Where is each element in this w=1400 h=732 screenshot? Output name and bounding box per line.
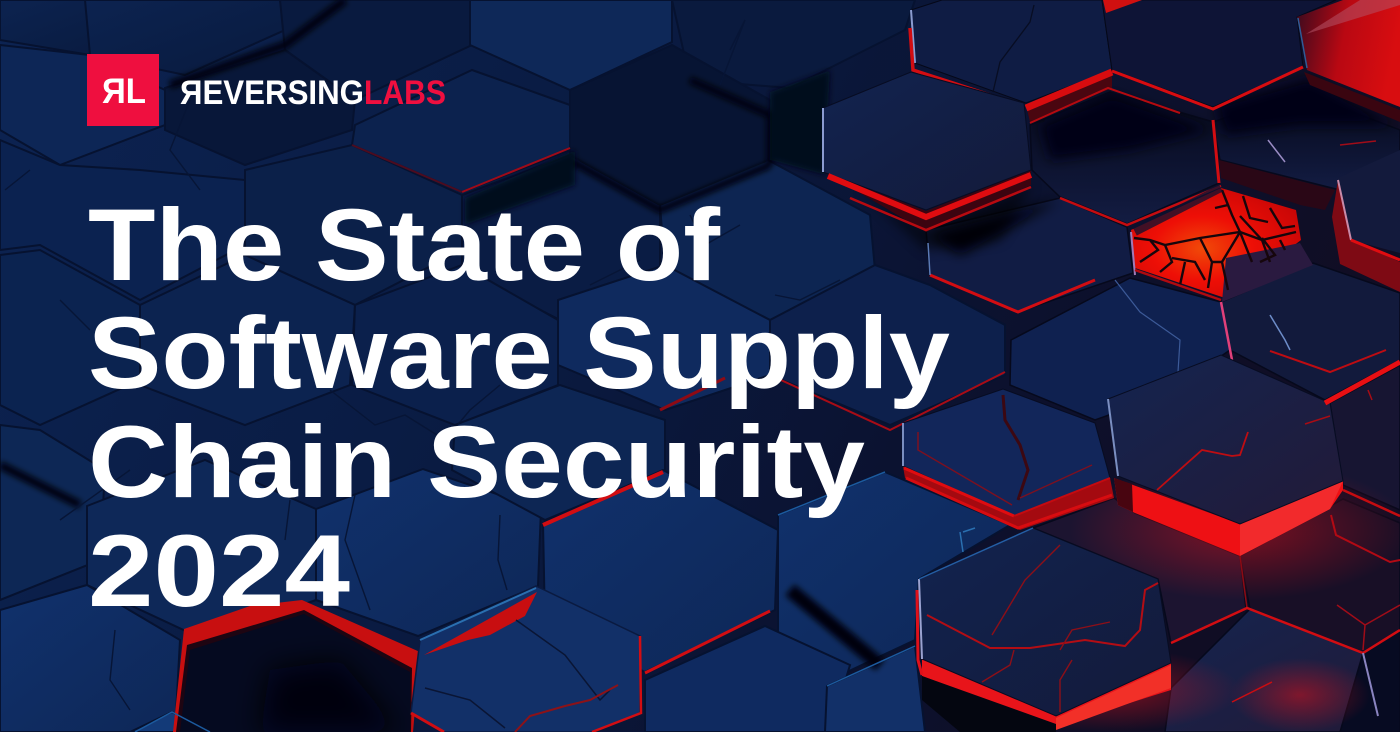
- title: [88, 188, 950, 628]
- hexagon: top centre: [910, 0, 1112, 103]
- hexagon: bright red rim: [1108, 355, 1400, 716]
- small blue crack: [960, 528, 975, 552]
- hexagon: red glowing corner: [1297, 0, 1400, 122]
- logo wordmark: ЯEVERSING: [180, 74, 364, 112]
- title: The State of: [88, 188, 721, 302]
- title: Software Supply: [88, 296, 950, 410]
- cracked blue hexagon: [411, 586, 641, 732]
- logo: [87, 54, 446, 126]
- cracks on blue hexagons: [5, 20, 840, 710]
- hexagon: top right: [1026, 0, 1336, 123]
- hexagon: cracked centre: [903, 389, 1114, 530]
- hexagon: large raised left: [823, 72, 1032, 250]
- left and centre blue hexagons: [0, 0, 1010, 732]
- hexagon: right middle edges and cracks: [1115, 140, 1386, 372]
- red glows: [980, 460, 1400, 732]
- dark seams and shadows on the left: [0, 0, 880, 665]
- logo wordmark: LABS: [364, 74, 446, 112]
- logo mark: ЯL: [102, 72, 146, 111]
- logo mark: [87, 54, 159, 126]
- hexagon: lower centre outline edges: [928, 186, 1221, 312]
- hexagon: cracked lava cell: [1131, 120, 1335, 302]
- hexagon shadow patches: [930, 78, 1395, 255]
- blue edges on lower left hexagons: [135, 472, 915, 732]
- title: 2024: [88, 514, 350, 628]
- hexagon: right edge red side: [1332, 150, 1400, 292]
- black hole hexagon with red rim: [173, 600, 420, 732]
- red edges on the left: [352, 145, 1005, 673]
- hexagon: large cracked foreground: [917, 528, 1171, 732]
- title: Chain Security: [88, 405, 865, 519]
- right side dark hexagons: [926, 92, 1400, 732]
